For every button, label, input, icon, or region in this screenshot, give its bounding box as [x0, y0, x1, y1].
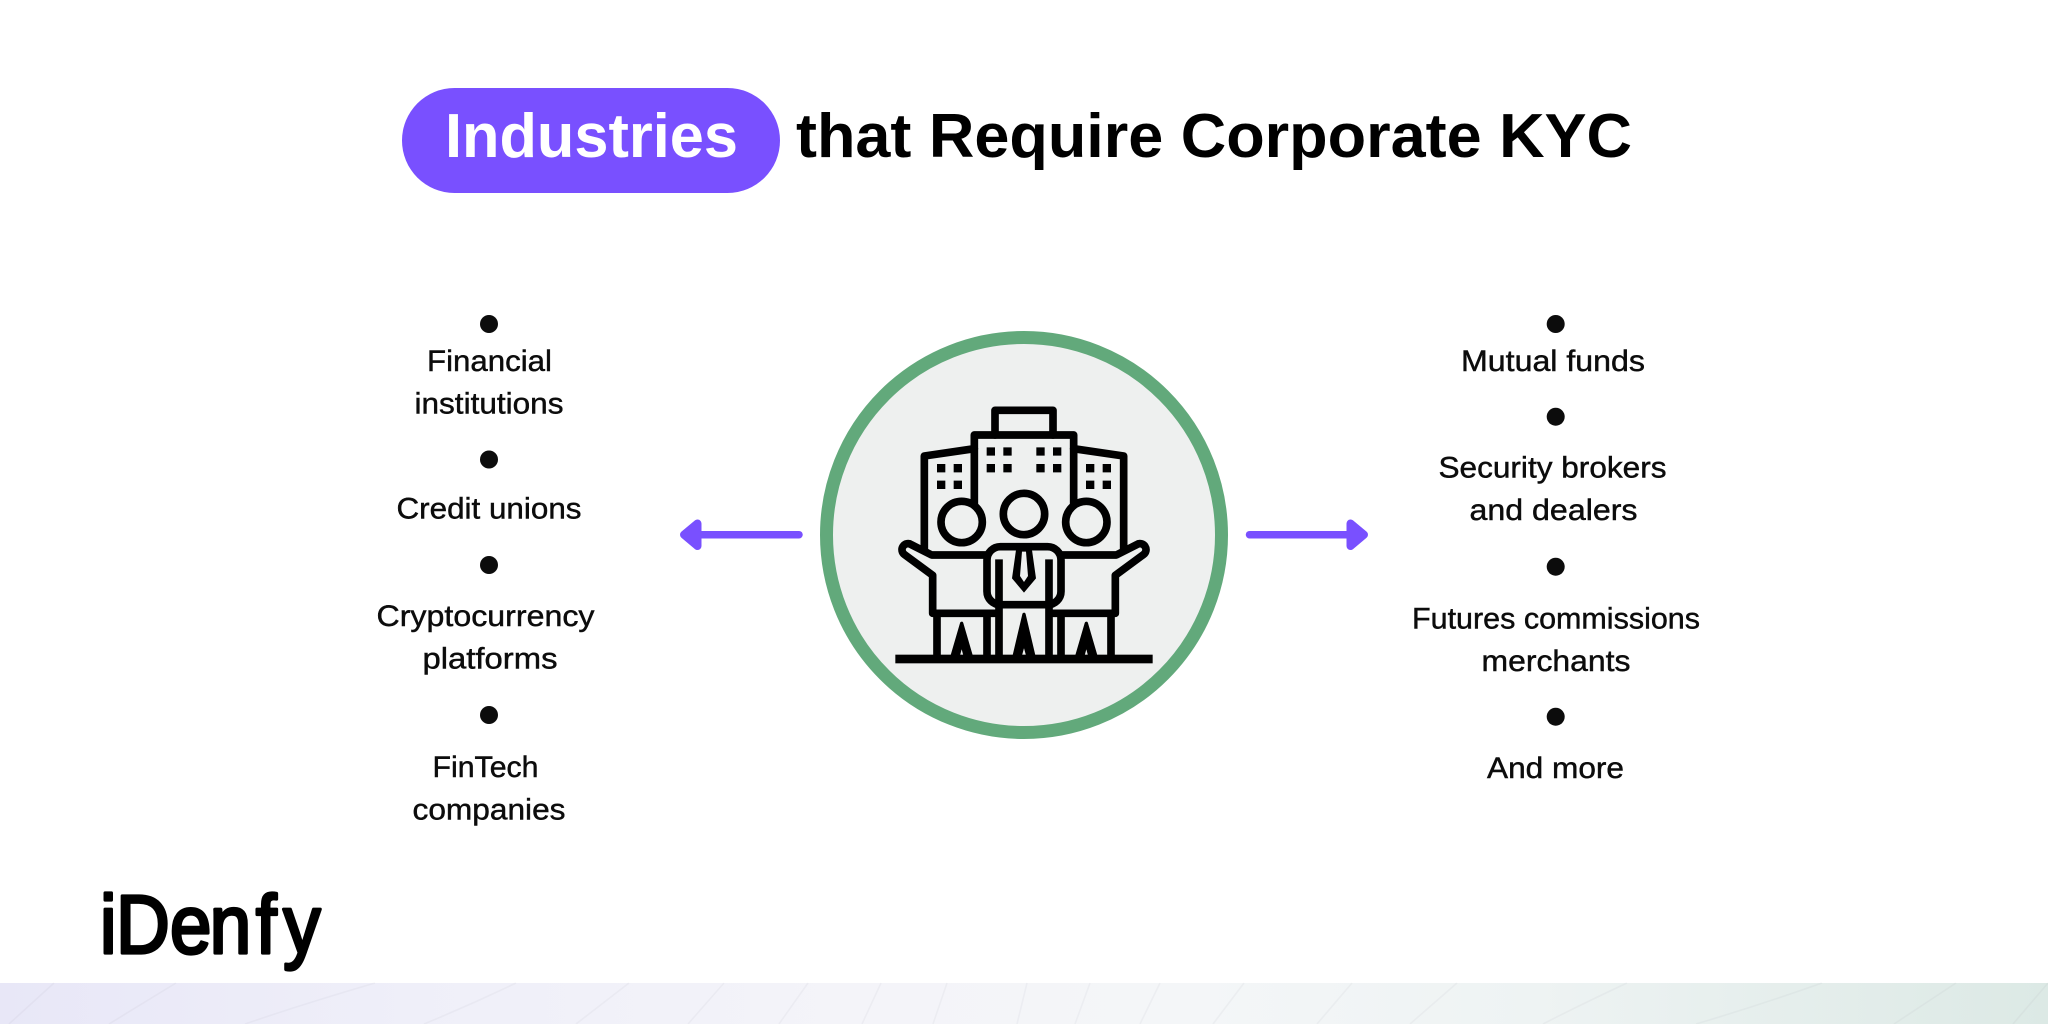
item: financial institutions: institutions: [414, 388, 564, 420]
ground: [895, 655, 1153, 663]
logo: iDenfy: [100, 878, 321, 971]
icon: buildings and business people: [895, 410, 1153, 663]
item: cryptocurrency platforms: [376, 600, 594, 676]
bullet: [480, 706, 498, 724]
circle: [826, 338, 1222, 732]
title highlight pill: Industries: [445, 102, 738, 171]
right person arm and torso: [1053, 544, 1146, 613]
bullet: [480, 556, 498, 574]
item: futures commissions merchants: Futures commissions: [1412, 602, 1700, 636]
item: security brokers and dealers: [1438, 452, 1666, 527]
central circle with icon: [826, 338, 1222, 732]
item: futures commissions merchants: merchants: [1482, 645, 1630, 678]
right list: [1412, 315, 1700, 785]
item: futures commissions merchants: [1412, 602, 1700, 678]
bullet: [480, 315, 498, 333]
item: security brokers and dealers: Security brokers: [1438, 452, 1666, 484]
footer gradient band: [0, 983, 2048, 1024]
item: fintech companies: companies: [412, 794, 566, 826]
left list: [376, 315, 594, 826]
item: credit unions: Credit unions: [396, 492, 582, 526]
item: and more: And more: [1487, 752, 1624, 785]
bullet: [1547, 708, 1565, 726]
item: cryptocurrency platforms: platforms: [422, 642, 558, 676]
bullet: [480, 450, 498, 468]
tie: [1012, 550, 1036, 593]
item: cryptocurrency platforms: Cryptocurrency: [376, 600, 594, 633]
item: fintech companies: [412, 751, 566, 826]
heads: [941, 501, 982, 543]
item: financial institutions: [414, 345, 564, 420]
item: fintech companies: FinTech: [432, 751, 538, 784]
bullet: [1547, 315, 1565, 333]
item: mutual funds: Mutual funds: [1461, 345, 1645, 378]
top box: [995, 410, 1053, 435]
title highlight pill: [402, 88, 780, 193]
windows: [937, 447, 1111, 489]
bullet: [1547, 558, 1565, 576]
leg gaps: [952, 614, 1096, 655]
centre building: [974, 435, 1074, 507]
bullet: [1547, 408, 1565, 426]
left person arm and torso: [902, 544, 995, 613]
item: security brokers and dealers: and dealers: [1470, 494, 1638, 527]
arrow: right: [1250, 524, 1364, 546]
title: [402, 88, 1632, 193]
title text: that Require Corporate KYC: [796, 102, 1632, 171]
side buildings: [924, 449, 1124, 550]
arrow: left: [684, 524, 799, 546]
legs: [937, 559, 1111, 657]
centre torso: [987, 547, 1061, 605]
item: financial institutions: Financial: [427, 345, 552, 378]
